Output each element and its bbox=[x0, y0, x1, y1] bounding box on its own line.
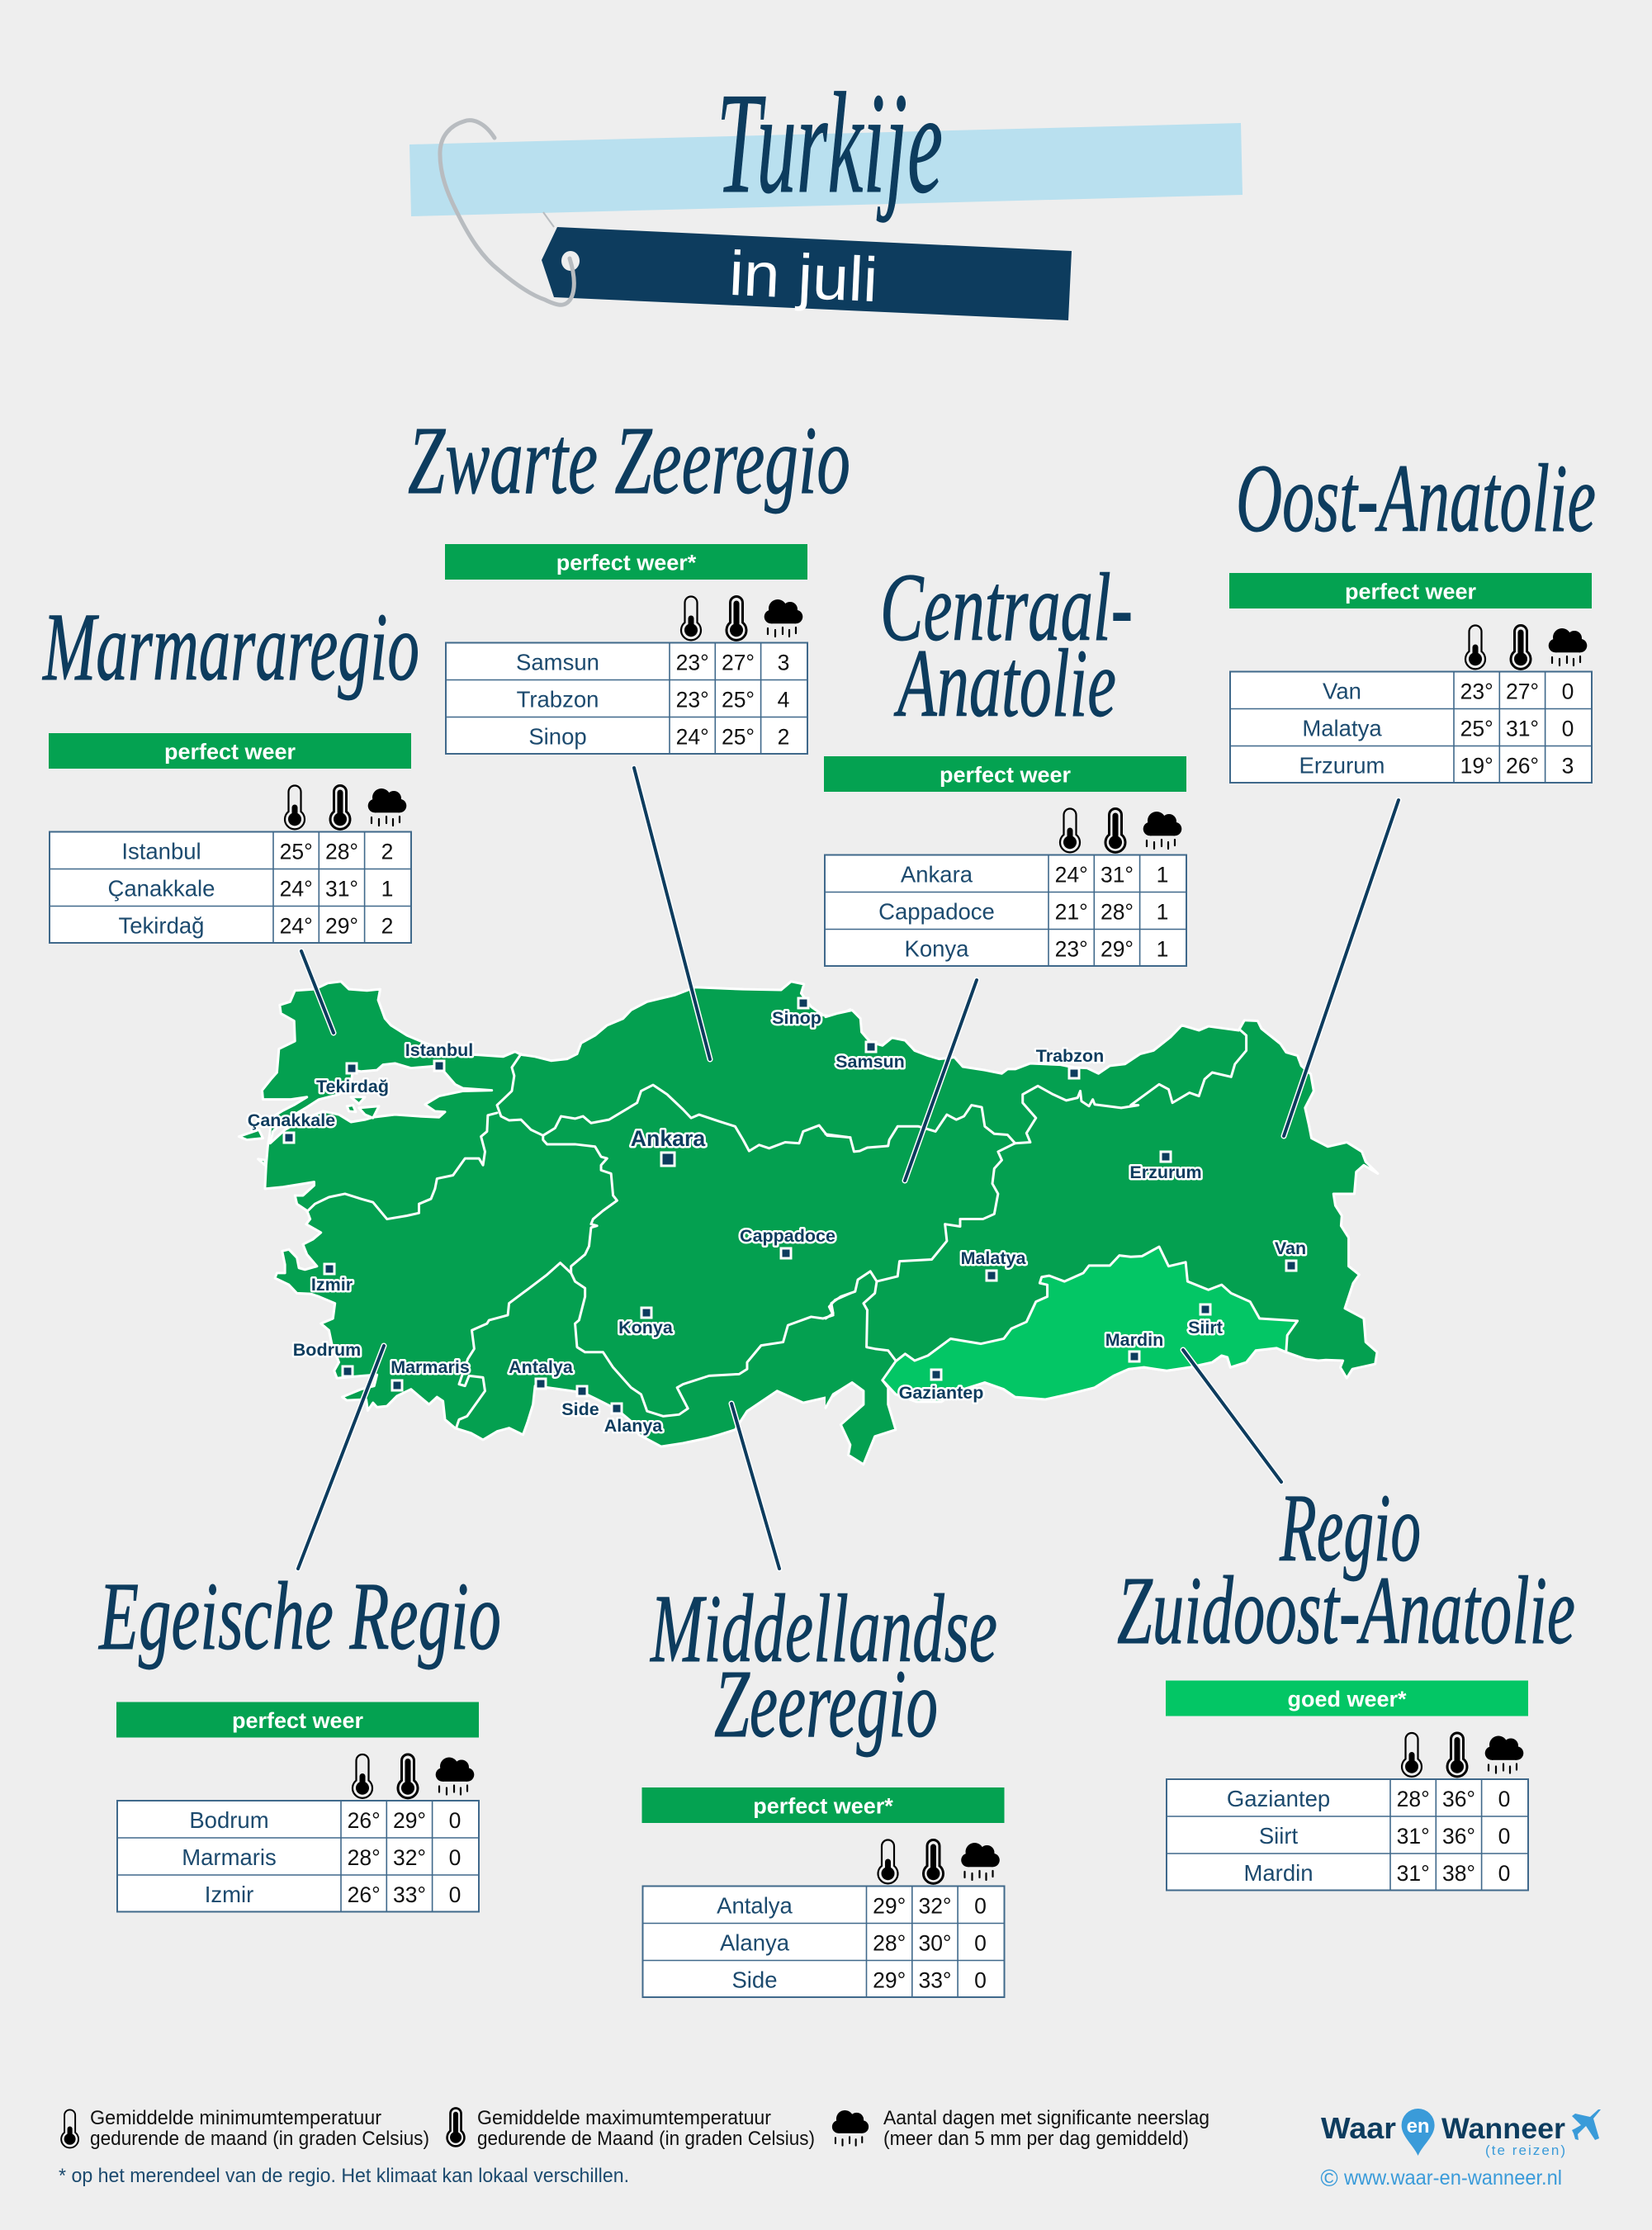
panel: Oost-Anatolie: Van bbox=[1323, 679, 1361, 704]
title block: in juli bbox=[727, 239, 879, 315]
map of Turkey bbox=[239, 982, 1378, 1465]
panel: Oost-Anatolie: 3 bbox=[1562, 753, 1574, 778]
icon: plane bbox=[1572, 2109, 1601, 2140]
panel: Oost-Anatolie: Malatya bbox=[1302, 715, 1382, 741]
panel: Egeische Regio: 29° bbox=[393, 1808, 426, 1833]
panel: Zwarte Zeeregio: Sinop bbox=[528, 723, 587, 749]
logo: Waar en Wanneer: en bbox=[1407, 2115, 1430, 2138]
panel: Middellandse Zeeregio: Antalya bbox=[717, 1893, 793, 1919]
panel: Middellandse Zeeregio: 30° bbox=[918, 1930, 952, 1955]
panel: Centraal-Anatolie: Anatolie bbox=[893, 629, 1116, 737]
panel: Regio Zuidoost-Anatolie: 0 bbox=[1498, 1787, 1510, 1811]
panel: Egeische Regio: 26° bbox=[348, 1808, 381, 1833]
panel: Zwarte Zeeregio: 25° bbox=[722, 687, 755, 712]
panel: Regio Zuidoost-Anatolie: Regio bbox=[1279, 1474, 1421, 1582]
city markers and labels: Samsun bbox=[835, 1052, 905, 1072]
panel: Marmararegio bbox=[42, 593, 419, 943]
panel: Egeische Regio: 33° bbox=[393, 1882, 426, 1907]
panel: Middellandse Zeeregio: 0 bbox=[974, 1930, 987, 1955]
logo: Waar en Wanneer: Waar bbox=[1321, 2111, 1396, 2145]
legend bbox=[59, 2107, 1209, 2187]
website credit: www.waar-en-wanneer.nl bbox=[1343, 2166, 1562, 2190]
panel: Oost-Anatolie: 0 bbox=[1562, 679, 1574, 704]
legend text: maximum temperature: gedurende de Maand (in graden Celsius) bbox=[477, 2128, 815, 2150]
panel: Zwarte Zeeregio: 3 bbox=[778, 651, 789, 675]
panel: Egeische Regio: 28° bbox=[348, 1845, 381, 1870]
panel: Regio Zuidoost-Anatolie: goed weer* bbox=[1287, 1687, 1407, 1712]
panel: Egeische Regio: Bodrum bbox=[189, 1807, 269, 1833]
panel: Middellandse Zeeregio: 0 bbox=[974, 1967, 987, 1992]
panel: Oost-Anatolie: 0 bbox=[1562, 717, 1574, 741]
panel: Zwarte Zeeregio: perfect weer* bbox=[556, 550, 697, 575]
logo: Waar en Wanneer: Wanneer bbox=[1441, 2113, 1565, 2145]
panel: Centraal-Anatolie: Ankara bbox=[901, 862, 973, 888]
panel: Regio Zuidoost-Anatolie: 38° bbox=[1442, 1861, 1475, 1886]
city markers and labels: Çanakkale bbox=[248, 1110, 335, 1130]
legend text: minimum temperature: gedurende de maand (in graden Celsius) bbox=[90, 2128, 429, 2150]
logo: Waar en Wanneer bbox=[1320, 2109, 1601, 2192]
legend text: precipitation: (meer dan 5 mm per dag gemiddeld) bbox=[883, 2128, 1189, 2150]
city markers and labels: Izmir bbox=[311, 1275, 353, 1295]
western land bbox=[239, 982, 850, 1446]
panel: Middellandse Zeeregio: Side bbox=[731, 1967, 778, 1992]
panel: Regio Zuidoost-Anatolie: Mardin bbox=[1243, 1860, 1314, 1886]
panel: Zwarte Zeeregio: 2 bbox=[778, 724, 789, 749]
panel: Centraal-Anatolie: 1 bbox=[1157, 900, 1168, 925]
city markers and labels: Malatya bbox=[961, 1248, 1026, 1268]
legend text: minimum temperature: Gemiddelde minimumtemperatuur bbox=[90, 2107, 381, 2129]
panel: Regio Zuidoost-Anatolie: 31° bbox=[1397, 1824, 1430, 1849]
city markers and labels: Bodrum bbox=[293, 1340, 361, 1360]
city markers and labels: Tekirdağ bbox=[316, 1077, 389, 1096]
panel: Centraal-Anatolie: Cappadoce bbox=[878, 898, 995, 925]
panel: Centraal-Anatolie: Konya bbox=[905, 935, 969, 961]
leader lines bbox=[298, 768, 1399, 1569]
panel: Regio Zuidoost-Anatolie: 36° bbox=[1442, 1787, 1475, 1811]
legend text: minimum temperature bbox=[90, 2107, 429, 2150]
city markers and labels: Mardin bbox=[1105, 1330, 1163, 1350]
panel: Marmararegio: Marmararegio bbox=[42, 593, 419, 701]
panel: Regio Zuidoost-Anatolie: Siirt bbox=[1259, 1823, 1299, 1849]
panel: Egeische Regio: 26° bbox=[348, 1882, 381, 1907]
panel: Marmararegio: perfect weer bbox=[164, 740, 296, 765]
panel: Centraal-Anatolie: 24° bbox=[1055, 863, 1088, 888]
panel: Centraal-Anatolie: 1 bbox=[1157, 863, 1168, 888]
panel: Marmararegio: 29° bbox=[325, 913, 358, 938]
legend text: maximum temperature: Gemiddelde maximumtemperatuur bbox=[477, 2107, 771, 2129]
panel: Regio Zuidoost-Anatolie: 0 bbox=[1498, 1861, 1510, 1886]
panel: Centraal-Anatolie: 31° bbox=[1101, 863, 1134, 888]
panel: Egeische Regio: Egeische Regio bbox=[98, 1562, 501, 1670]
city markers and labels: Marmaris bbox=[391, 1357, 470, 1377]
panel: Regio Zuidoost-Anatolie: 31° bbox=[1397, 1861, 1430, 1886]
panel: Middellandse Zeeregio: 29° bbox=[873, 1967, 906, 1992]
panel: Oost-Anatolie: 23° bbox=[1460, 679, 1493, 704]
panel: Zwarte Zeeregio: Zwarte Zeeregio bbox=[408, 406, 850, 514]
region: Zuidoost-Anatolie bbox=[883, 1247, 1298, 1402]
city markers and labels: Sinop bbox=[772, 1008, 821, 1028]
panel: Oost-Anatolie: 25° bbox=[1460, 717, 1493, 741]
panel: Middellandse Zeeregio: perfect weer* bbox=[753, 1793, 893, 1818]
panel: Oost-Anatolie: Erzurum bbox=[1299, 752, 1385, 778]
panel: Regio Zuidoost-Anatolie bbox=[1117, 1474, 1575, 1891]
city markers and labels: Konya bbox=[618, 1318, 674, 1338]
panel: Egeische Regio: 0 bbox=[449, 1845, 461, 1870]
panel: Centraal-Anatolie: 21° bbox=[1055, 900, 1088, 925]
panel: Oost-Anatolie bbox=[1229, 444, 1596, 783]
panel: Egeische Regio bbox=[98, 1562, 501, 1912]
city markers and labels bbox=[248, 998, 1306, 1436]
panel: Marmararegio: 25° bbox=[280, 840, 313, 864]
legend text: precipitation bbox=[883, 2107, 1209, 2150]
city markers and labels: Ankara bbox=[631, 1126, 706, 1151]
icon: maximum temperature bbox=[447, 2108, 464, 2146]
panel: Middellandse Zeeregio: 0 bbox=[974, 1894, 987, 1919]
panel: Zwarte Zeeregio: 23° bbox=[676, 651, 709, 675]
panel: Marmararegio: 1 bbox=[381, 877, 393, 902]
panel: Marmararegio: 2 bbox=[381, 913, 393, 938]
panel: Zwarte Zeeregio: Trabzon bbox=[517, 687, 599, 712]
city markers and labels: Trabzon bbox=[1036, 1046, 1104, 1066]
city markers and labels: Gaziantep bbox=[899, 1383, 983, 1403]
legend text: precipitation: Aantal dagen met significante neerslag bbox=[883, 2107, 1209, 2129]
panel: Marmararegio: Tekirdağ bbox=[119, 912, 204, 938]
panel: Regio Zuidoost-Anatolie: 28° bbox=[1397, 1787, 1430, 1811]
panel: Zwarte Zeeregio: Samsun bbox=[516, 650, 599, 675]
icon: minimum temperature bbox=[61, 2109, 78, 2147]
title block bbox=[409, 63, 1243, 320]
panel: Marmararegio: Çanakkale bbox=[108, 875, 215, 902]
panel: Egeische Regio: Izmir bbox=[205, 1882, 253, 1907]
logo: Waar en Wanneer: (te reizen) bbox=[1485, 2142, 1565, 2158]
panel: Middellandse Zeeregio: 29° bbox=[873, 1894, 906, 1919]
panel: Middellandse Zeeregio: Zeeregio bbox=[714, 1650, 938, 1758]
website credit: © bbox=[1320, 2166, 1338, 2192]
panel: Oost-Anatolie: 27° bbox=[1506, 679, 1539, 704]
city markers and labels: Antalya bbox=[509, 1357, 574, 1377]
city markers and labels: Alanya bbox=[604, 1416, 663, 1436]
panel: Zwarte Zeeregio: 23° bbox=[676, 687, 709, 712]
panel: Marmararegio: 28° bbox=[325, 840, 358, 864]
panel: Regio Zuidoost-Anatolie: 0 bbox=[1498, 1824, 1510, 1849]
panel: Regio Zuidoost-Anatolie: Gaziantep bbox=[1227, 1786, 1330, 1811]
panel: Oost-Anatolie: 31° bbox=[1506, 717, 1539, 741]
panel: Zwarte Zeeregio: 25° bbox=[722, 724, 755, 749]
panel: Marmararegio: 24° bbox=[280, 913, 313, 938]
city markers and labels: Erzurum bbox=[1129, 1162, 1202, 1182]
panel: Zwarte Zeeregio: 27° bbox=[722, 651, 755, 675]
panel: Marmararegio: 24° bbox=[280, 877, 313, 902]
panel: Egeische Regio: Marmaris bbox=[182, 1844, 277, 1870]
panel: Centraal-Anatolie: perfect weer bbox=[940, 763, 1072, 788]
panel: Egeische Regio: 32° bbox=[393, 1845, 426, 1870]
panel: Centraal-Anatolie: Centraal- bbox=[880, 553, 1133, 661]
panel: Middellandse Zeeregio: Alanya bbox=[720, 1930, 790, 1955]
panel: Oost-Anatolie: perfect weer bbox=[1345, 580, 1477, 604]
panel: Zwarte Zeeregio bbox=[408, 406, 850, 754]
panel: Marmararegio: Istanbul bbox=[121, 839, 201, 864]
panel: Marmararegio: 31° bbox=[325, 877, 358, 902]
panel: Oost-Anatolie: 19° bbox=[1460, 753, 1493, 778]
footnote: * op het merendeel van de regio. Het klimaat kan lokaal verschillen. bbox=[59, 2165, 629, 2187]
eastern land bbox=[826, 1010, 1378, 1465]
panel: Centraal-Anatolie: 1 bbox=[1157, 936, 1168, 961]
panel: Zwarte Zeeregio: 4 bbox=[778, 687, 789, 712]
city markers and labels: Van bbox=[1275, 1238, 1306, 1258]
city markers and labels: Istanbul bbox=[405, 1040, 473, 1060]
panel: Middellandse Zeeregio: 33° bbox=[918, 1967, 952, 1992]
panel: Egeische Regio: perfect weer bbox=[232, 1708, 364, 1733]
panel: Centraal-Anatolie: 23° bbox=[1055, 936, 1088, 961]
panel: Centraal-Anatolie: 28° bbox=[1101, 900, 1134, 925]
panel: Middellandse Zeeregio: 32° bbox=[918, 1894, 952, 1919]
legend text: maximum temperature bbox=[477, 2107, 815, 2150]
title block: Turkije bbox=[717, 63, 943, 223]
panel: Marmararegio: 2 bbox=[381, 840, 393, 864]
city markers and labels: Siirt bbox=[1188, 1318, 1223, 1338]
panel: Egeische Regio: 0 bbox=[449, 1882, 461, 1907]
panel: Regio Zuidoost-Anatolie: 36° bbox=[1442, 1824, 1475, 1849]
panel: Oost-Anatolie: 26° bbox=[1506, 753, 1539, 778]
sea of Marmara and region borders in the west bbox=[270, 1054, 850, 1428]
panel: Centraal-Anatolie: 29° bbox=[1101, 936, 1134, 961]
city markers and labels: Side bbox=[561, 1399, 599, 1419]
panel: Middellandse Zeeregio: Middellandse bbox=[650, 1574, 997, 1683]
panel: Centraal-Anatolie bbox=[824, 553, 1186, 966]
city markers and labels: Cappadoce bbox=[740, 1226, 835, 1246]
panel: Zwarte Zeeregio: 24° bbox=[676, 724, 709, 749]
panel: Egeische Regio: 0 bbox=[449, 1808, 461, 1833]
panel: Middellandse Zeeregio: 28° bbox=[873, 1930, 906, 1955]
panel: Middellandse Zeeregio bbox=[642, 1574, 1004, 1997]
icon: rain cloud bbox=[832, 2110, 869, 2146]
